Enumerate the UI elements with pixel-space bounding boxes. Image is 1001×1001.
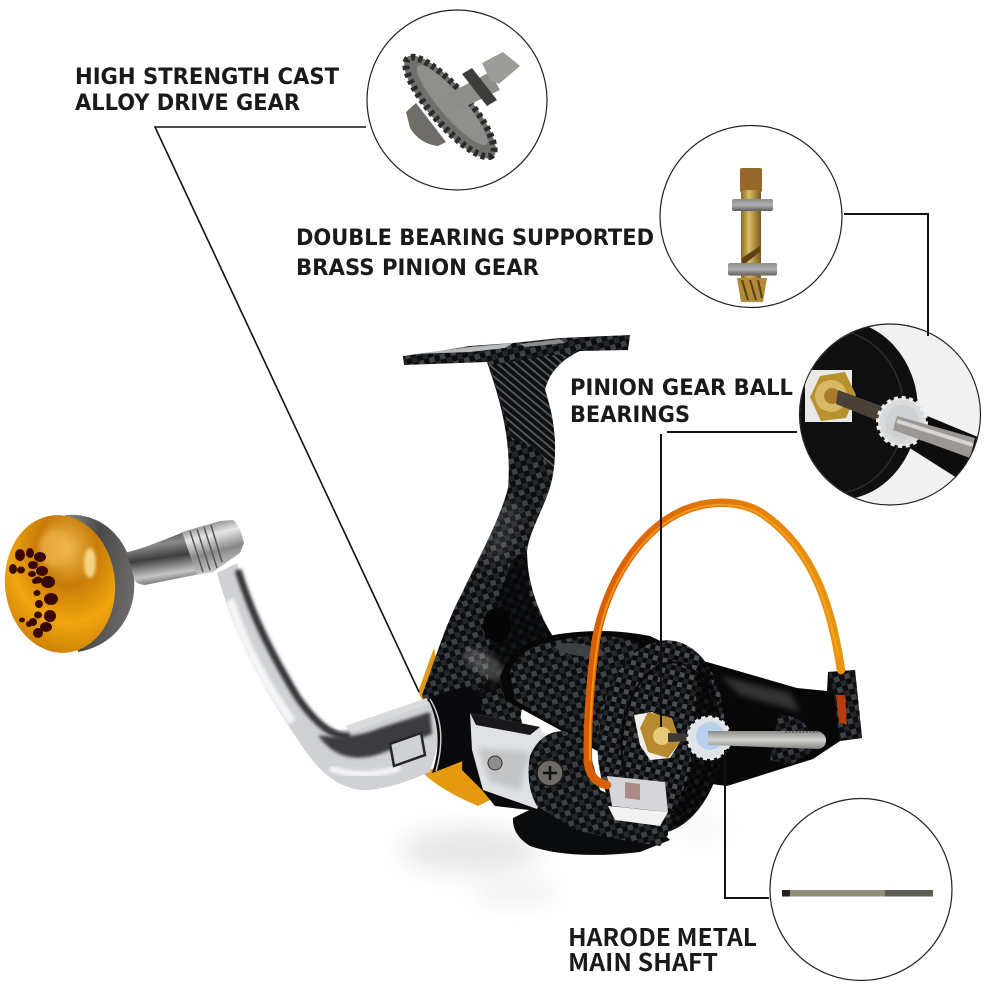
inset: ball bearings — [798, 323, 982, 506]
label: ball bearings — [570, 376, 793, 428]
leader line: drive gear — [155, 127, 419, 692]
brass pinion part — [728, 168, 777, 302]
label: main shaft: HARODE METAL — [568, 918, 757, 953]
label: drive gear: HIGH STRENGTH CAST — [75, 65, 339, 90]
orange bail wire — [588, 503, 841, 785]
rotor disc — [598, 640, 724, 832]
inset: main shaft — [770, 798, 952, 980]
label: ball bearings: BEARINGS — [570, 403, 690, 428]
shaft part — [782, 890, 933, 896]
main housing — [500, 631, 862, 786]
label: main shaft — [568, 918, 757, 978]
knob holes — [9, 548, 58, 638]
large screw — [537, 760, 563, 786]
carbon bail arm — [529, 731, 668, 846]
inset: brass pinion gear — [660, 126, 842, 308]
drive gear part — [392, 44, 520, 170]
label: ball bearings: PINION GEAR BALL — [570, 376, 793, 401]
crank handle arm — [217, 563, 445, 790]
small screw — [488, 756, 502, 770]
label: brass pinion: DOUBLE BEARING SUPPORTED — [296, 226, 654, 251]
label: drive gear — [75, 65, 339, 116]
label: brass pinion: BRASS PINION GEAR — [296, 256, 539, 281]
silver line roller — [607, 776, 668, 826]
leader line: main shaft — [725, 750, 769, 898]
handle collar — [390, 687, 482, 773]
label: brass pinion — [296, 226, 654, 281]
handle knob — [0, 510, 134, 658]
front chrome plate — [470, 713, 560, 809]
reel stem and foot — [403, 335, 630, 740]
label: drive gear: ALLOY DRIVE GEAR — [75, 91, 300, 116]
bottom foot — [513, 800, 670, 855]
leader line: brass pinion — [844, 214, 928, 336]
label: main shaft: MAIN SHAFT — [568, 943, 718, 978]
brass nut — [634, 712, 692, 760]
main shaft — [708, 731, 826, 749]
fishing reel — [0, 335, 862, 855]
dark backing behind plate — [462, 690, 545, 812]
floor shadow — [400, 824, 730, 902]
leader line: ball bearings — [661, 432, 797, 727]
gold skirt — [418, 648, 490, 806]
inset: drive gear — [367, 10, 547, 190]
pinion gear — [688, 717, 730, 759]
handle neck — [126, 520, 244, 585]
